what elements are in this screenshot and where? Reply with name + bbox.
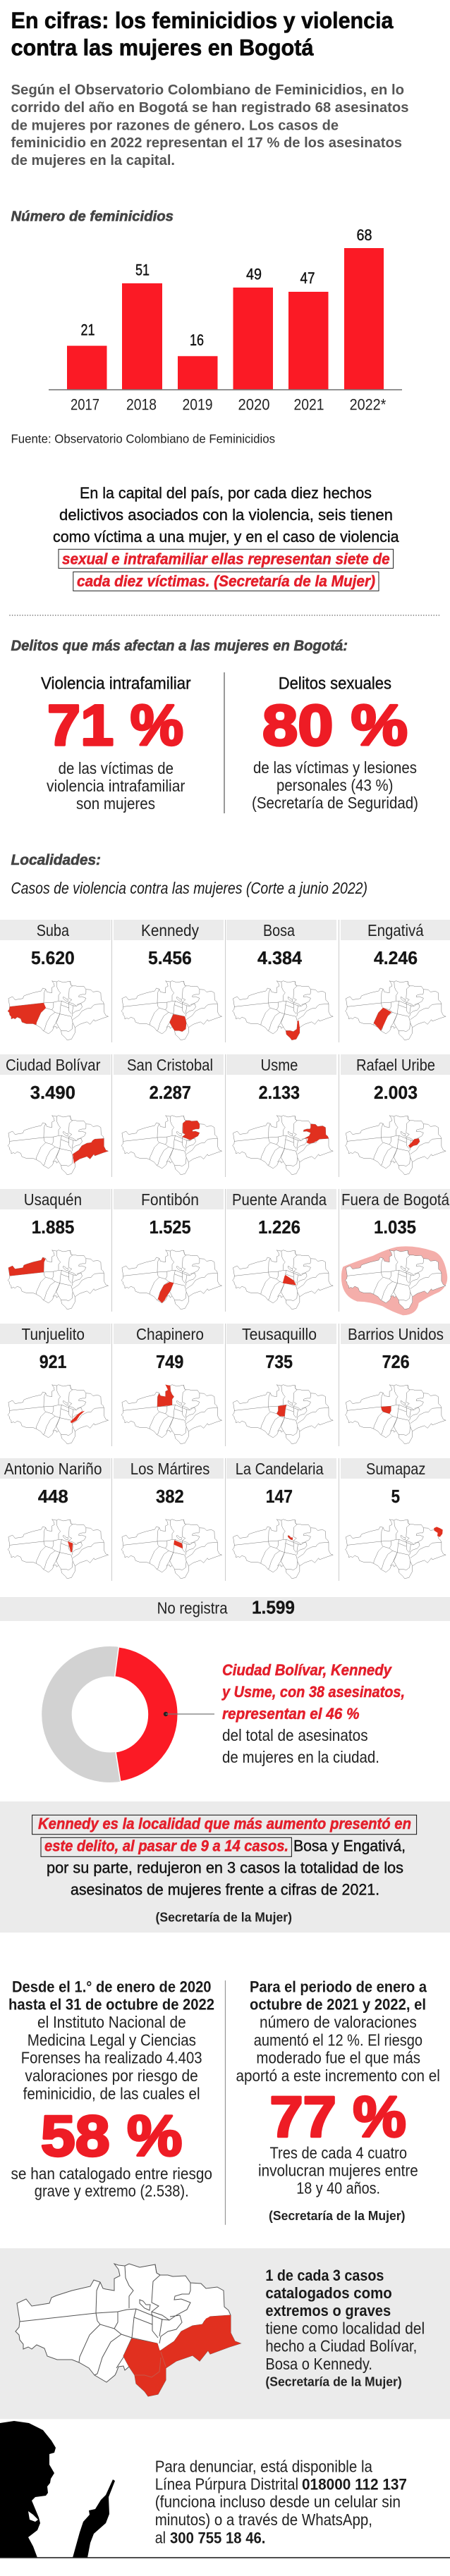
description: de las víctimas de <box>59 759 174 777</box>
cell: Suba: 5.620 <box>31 947 75 968</box>
title: contra las mujeres en Bogotá <box>11 35 314 60</box>
contact text: (funciona incluso desde un celular sin <box>155 2493 401 2511</box>
donut text: del total de asesinatos <box>222 1726 368 1744</box>
body text: moderado fue el que más <box>256 2049 420 2067</box>
body text: asesinatos de mujeres frente a cifras de 2021. <box>71 1880 379 1898</box>
description <box>47 759 186 813</box>
cell: Ciudad Bolívar <box>6 1056 109 1175</box>
source: Fuente: Observatorio Colombiano de Feminicidios <box>11 432 275 446</box>
cell: Usaquén: Usaquén <box>24 1190 82 1209</box>
intro paragraph: de mujeres por razones de género. Los casos de <box>11 117 339 134</box>
highlighted boxes <box>59 549 394 591</box>
body text: Medicina Legal y Ciencias <box>28 2030 196 2049</box>
cell: Teusaquillo: Teusaquillo <box>242 1325 317 1343</box>
cell: Tunjuelito: Tunjuelito <box>21 1325 85 1343</box>
cell: Engativá: 4.246 <box>374 947 418 968</box>
bold lead <box>250 1978 427 2014</box>
text: (Secretaría de la Mujer) <box>265 2375 402 2389</box>
description <box>258 2144 418 2198</box>
description <box>252 758 418 812</box>
highlighted boxes <box>32 1815 417 1856</box>
description: personales (43 %) <box>276 776 393 794</box>
year labels: 2019 <box>182 396 213 414</box>
year labels: 2020 <box>238 396 269 414</box>
bar values: 16 <box>190 331 204 349</box>
cell: Suba <box>8 921 109 1040</box>
panel: mapa 1 de cada 3 casos <box>0 2248 450 2419</box>
highlighted boxes: Kennedy es la localidad que más aumento presentó en <box>38 1815 411 1832</box>
description: se han catalogado entre riesgo <box>11 2164 212 2183</box>
bar values: 49 <box>246 266 262 283</box>
donut text: Ciudad Bolívar, Kennedy <box>222 1661 393 1679</box>
map <box>16 2264 241 2396</box>
contact text: al <box>155 2528 166 2546</box>
body text: el Instituto Nacional de <box>37 2013 186 2031</box>
cell: Chapinero: 749 <box>156 1351 183 1372</box>
cell: Puente Aranda: Puente Aranda <box>232 1190 327 1209</box>
highlighted boxes: sexual e intrafamiliar ellas representan siete de <box>62 550 390 568</box>
cell: Rafael Uribe: 2.003 <box>374 1082 418 1103</box>
cell: Antonio Nariño: Antonio Nariño <box>4 1460 102 1478</box>
stat 58 %: 58 % <box>41 2104 182 2168</box>
cell: Usme: Usme <box>261 1056 298 1074</box>
cell: San Cristobal: 2.287 <box>150 1082 191 1103</box>
panel: no registra: 1.599 <box>252 1596 295 1617</box>
cell: Puente Aranda: 1.226 <box>258 1216 300 1238</box>
cell: Fontibón <box>121 1190 222 1309</box>
bar values: 68 <box>357 226 372 244</box>
contact text: Línea Púrpura Distrital <box>155 2475 298 2493</box>
year labels <box>71 396 387 414</box>
highlighted boxes: cada diez víctimas. (Secretaría de la Mujer) <box>77 572 375 590</box>
intro paragraph: feminicidio en 2022 representan el 17 % de los asesinatos <box>11 135 402 151</box>
stat 77 %: 77 % <box>269 2085 406 2150</box>
cell: Fontibón: 1.525 <box>150 1216 191 1238</box>
heading: localidades: Localidades: <box>11 851 101 868</box>
cell: Engativá: Engativá <box>367 921 424 939</box>
chart heading: Número de feminicidios <box>11 209 174 224</box>
cell: Suba: Suba <box>37 921 69 939</box>
cell: Ciudad Bolívar: Ciudad Bolívar <box>6 1056 101 1074</box>
cell: Chapinero: Chapinero <box>136 1325 204 1343</box>
text: extremos o graves <box>265 2302 391 2319</box>
cell: Usme: 2.133 <box>259 1082 300 1103</box>
callout: capital del país: En la capital del país, por cada diez hechos <box>80 484 372 502</box>
contact text: Para denunciar, está disponible la <box>155 2457 373 2475</box>
donut text: y Usme, con 38 asesinatos, <box>221 1683 405 1701</box>
cell: Fuera de Bogotá: 1.035 <box>374 1216 416 1238</box>
panel: Medicina Legal <box>8 1978 214 2200</box>
cell: Rafael Uribe: Rafael Uribe <box>356 1056 435 1074</box>
description: violencia intrafamiliar <box>47 777 186 795</box>
cell: Kennedy: 5.456 <box>148 947 192 968</box>
body text: Forenses ha realizado 4.403 <box>21 2049 202 2067</box>
text: Bosa o Kennedy. <box>265 2355 372 2373</box>
panel: violencia intrafamiliar <box>41 674 191 813</box>
cell: Los Mártires: Los Mártires <box>130 1460 209 1478</box>
bar values <box>80 226 372 349</box>
description: son mujeres <box>76 794 155 813</box>
year labels: 2021 <box>293 396 324 414</box>
subheading: Casos de violencia contra las mujeres (Corte a junio 2022) <box>11 879 367 897</box>
text: tiene como localidad del <box>265 2319 425 2338</box>
cell: Kennedy <box>121 921 222 1040</box>
bold lead: octubre de 2021 y 2022, el <box>250 1996 426 2014</box>
description: (Secretaría de Seguridad) <box>252 794 418 812</box>
bold lead <box>8 1978 214 2014</box>
body text <box>47 1837 406 1898</box>
cell: Sumapaz: Sumapaz <box>366 1460 425 1478</box>
bold lead: Desde el 1.° de enero de 2020 <box>12 1978 212 1996</box>
cell: Tunjuelito: 921 <box>39 1351 66 1372</box>
panel: no registra <box>0 1596 450 1621</box>
bar values: 51 <box>135 261 150 279</box>
cell: Bosa: Bosa <box>263 921 295 939</box>
cell: Kennedy: Kennedy <box>141 921 199 939</box>
body text: feminicidio, de las cuales el <box>23 2084 200 2102</box>
title <box>11 8 394 60</box>
body text: Bosa y Engativá, <box>293 1837 406 1855</box>
panel: delitos sexuales <box>252 674 418 812</box>
cell: Bosa: 4.384 <box>257 947 303 968</box>
body text: aumentó el 12 %. El riesgo <box>254 2030 422 2049</box>
bar values: 47 <box>300 269 315 287</box>
description: 18 y 40 años. <box>296 2179 380 2198</box>
year labels: 2017 <box>71 396 99 414</box>
cell: Usaquén: 1.885 <box>32 1216 74 1238</box>
cell: Tunjuelito <box>8 1325 109 1444</box>
body text <box>21 2013 202 2102</box>
title: En cifras: los feminicidios y violencia <box>11 8 394 33</box>
cell: San Cristobal: San Cristobal <box>127 1056 213 1074</box>
cell: Antonio Nariño <box>4 1460 109 1579</box>
panel: localidades grid <box>0 920 450 1581</box>
panel: Kennedy callout <box>0 1801 450 1933</box>
contact text: 018000 112 137 <box>302 2475 407 2493</box>
cell: Sumapaz <box>346 1460 446 1579</box>
year labels: 2022* <box>350 396 387 414</box>
cell: Sumapaz: 5 <box>391 1486 400 1507</box>
cell: Los Mártires: 382 <box>156 1486 184 1507</box>
cell: Ciudad Bolívar: 3.490 <box>30 1082 75 1103</box>
body text: por su parte, redujeron en 3 casos la totalidad de los <box>47 1859 403 1876</box>
panel: delitos sexuales: Delitos sexuales <box>279 674 391 694</box>
intro paragraph: de mujeres en la capital. <box>11 152 175 168</box>
cell: Antonio Nariño: 448 <box>38 1486 68 1507</box>
cell: La Candelaria <box>233 1460 333 1579</box>
intro paragraph: Según el Observatorio Colombiano de Feminicidios, en lo <box>11 82 404 98</box>
heading: delitos: Delitos que más afectan a las mujeres en Bogotá: <box>11 637 348 654</box>
intro paragraph <box>11 82 409 168</box>
year labels: 2018 <box>126 396 157 414</box>
cell: La Candelaria: La Candelaria <box>236 1460 324 1478</box>
description <box>11 2164 212 2200</box>
donut text <box>221 1661 405 1766</box>
cell: Engativá <box>346 921 446 1040</box>
cell: Barrios Unidos <box>346 1325 446 1444</box>
source: (Secretaría de la Mujer) <box>155 1911 292 1925</box>
highlighted boxes: este delito, al pasar de 9 a 14 casos. <box>44 1837 288 1855</box>
contact text: 300 755 18 46. <box>170 2529 265 2546</box>
cell: Usaquén <box>8 1190 109 1309</box>
callout: capital del país: como víctima a una mujer, y en el caso de violencia <box>53 528 399 546</box>
cell: San Cristobal <box>121 1056 222 1175</box>
donut chart <box>56 1647 214 1782</box>
body text <box>236 2013 440 2085</box>
body text: valoraciones por riesgo de <box>25 2066 198 2085</box>
cell: Bosa <box>233 921 333 1040</box>
bold lead: hasta el 31 de octubre de 2022 <box>8 1996 214 2014</box>
cell: Teusaquillo: 735 <box>265 1351 293 1372</box>
contact text: minutos) o a través de WhatsApp, <box>155 2510 372 2529</box>
axis line <box>49 389 402 390</box>
bar chart: número de feminicidios <box>11 209 402 414</box>
description: grave y extremo (2.538). <box>35 2182 189 2200</box>
text <box>265 2267 425 2389</box>
panel: periodo enero-octubre <box>236 1978 440 2223</box>
text: 1 de cada 3 casos <box>265 2267 384 2284</box>
cell: Puente Aranda <box>232 1190 333 1309</box>
body text: número de valoraciones <box>260 2013 417 2031</box>
bold lead: Para el periodo de enero a <box>250 1978 427 1996</box>
panel: violencia intrafamiliar: Violencia intrafamiliar <box>41 674 191 694</box>
panel: no registra: No registra <box>157 1598 228 1617</box>
description: Tres de cada 4 cuatro <box>269 2144 407 2162</box>
stat 80 %: 80 % <box>262 694 408 758</box>
bar values: 21 <box>80 321 95 338</box>
bars <box>67 248 384 390</box>
cell: Fuera de Bogotá <box>341 1190 449 1315</box>
icon: woman silhouette with phone <box>0 2421 115 2558</box>
text: hecho a Ciudad Bolívar, <box>265 2337 417 2355</box>
callout: capital del país: delictivos asociados con la violencia, seis tienen <box>59 506 393 524</box>
description: de las víctimas y lesiones <box>253 758 417 777</box>
cell: Los Mártires <box>121 1460 222 1579</box>
intro paragraph: corrido del año en Bogotá se han registrado 68 asesinatos <box>11 99 409 116</box>
text: catalogados como <box>265 2284 392 2302</box>
source: (Secretaría de la Mujer) <box>269 2209 405 2223</box>
cell: Fontibón: Fontibón <box>141 1190 199 1209</box>
donut text: representan el 46 % <box>222 1705 360 1723</box>
callout: capital del país <box>53 484 399 591</box>
cell: Teusaquillo <box>233 1325 333 1444</box>
cell: La Candelaria: 147 <box>266 1486 293 1507</box>
description: involucran mujeres entre <box>258 2162 418 2180</box>
cell: Usme <box>233 1056 333 1175</box>
stat 71 %: 71 % <box>47 694 183 758</box>
donut text: de mujeres en la ciudad. <box>222 1748 379 1766</box>
cell: Barrios Unidos: 726 <box>382 1351 410 1372</box>
cell: Rafael Uribe <box>346 1056 446 1175</box>
contact text <box>155 2457 407 2546</box>
cell: Chapinero <box>121 1325 222 1444</box>
